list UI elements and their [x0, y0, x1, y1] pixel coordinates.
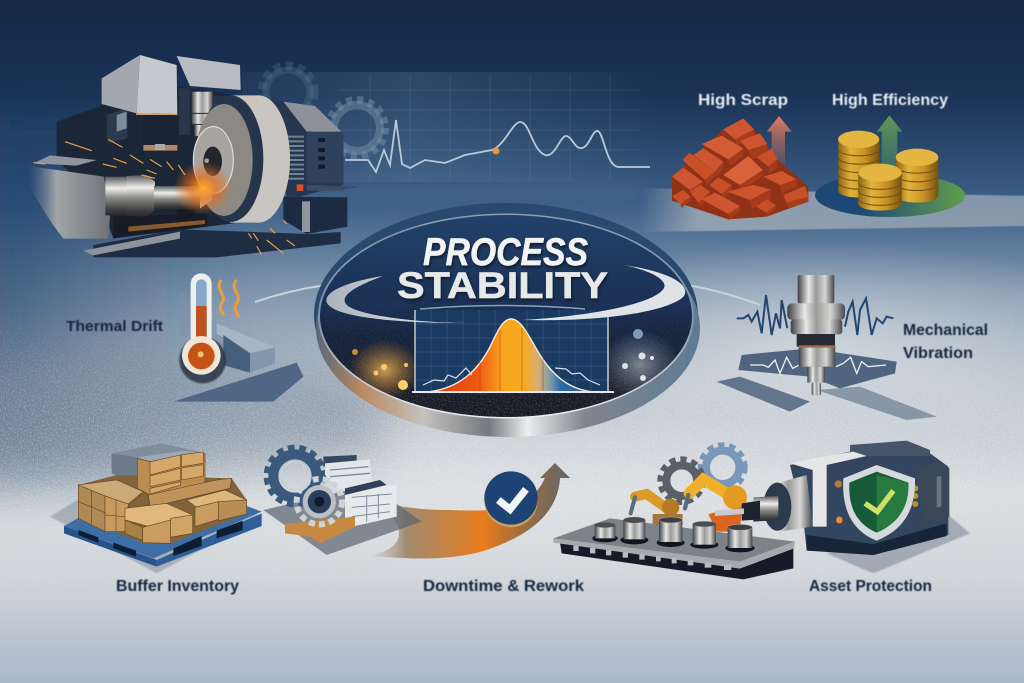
label: asset protection: Asset Protection: [809, 578, 932, 595]
icon: thermometer: [173, 273, 303, 402]
heat waves: [219, 280, 239, 317]
machine rear body: [57, 87, 233, 238]
arrow: scrap up: [767, 116, 792, 170]
icon: gold coins: [815, 115, 965, 217]
spindle: [787, 275, 845, 395]
wooden pallet: [285, 517, 355, 543]
connector lines: [255, 285, 760, 305]
small gear: [297, 479, 342, 524]
label: downtime and rework: Downtime & Rework: [423, 578, 584, 595]
badge halo: [314, 203, 698, 427]
coin stack right: [896, 149, 938, 203]
shadow: [179, 337, 226, 383]
badge face: [320, 215, 692, 417]
machine body: [790, 441, 949, 555]
machine base: [93, 229, 341, 257]
brick pile: [672, 118, 808, 219]
machine nose: [715, 475, 813, 532]
grinding wheel: [193, 95, 290, 223]
base step: [173, 363, 303, 402]
large gear: [267, 448, 323, 504]
chart: stability bell curve: [412, 310, 614, 393]
coin base oval: [815, 174, 965, 217]
metal rim: [316, 219, 700, 437]
pallet: [64, 488, 262, 567]
machined cylinders: [592, 517, 755, 552]
robot arm left: [631, 494, 683, 525]
floor tile: [263, 485, 422, 555]
icon: vibration spindle: [717, 275, 937, 420]
icon: scrap bricks: [672, 116, 808, 219]
upper block: [102, 55, 241, 152]
label: high efficiency: High Efficiency: [832, 92, 948, 109]
documents: [323, 455, 397, 526]
right housing: [267, 100, 359, 234]
icon: check badge: [484, 471, 538, 527]
workpiece: [28, 155, 212, 239]
label: thermal drift: Thermal Drift: [66, 318, 163, 335]
sparks: [33, 139, 295, 255]
icon: robot production line: [553, 446, 795, 579]
title: [397, 231, 608, 306]
coin stack left: [838, 131, 879, 197]
ghost chart: signal trace: [242, 66, 662, 182]
robot arm right: [685, 479, 747, 532]
machine shadow: [827, 513, 970, 573]
label: mechanical vibration: [903, 322, 988, 362]
label: buffer inventory: Buffer Inventory: [116, 578, 239, 595]
icon: buffer inventory pallet: [50, 443, 263, 573]
metal bar: [180, 290, 275, 373]
label: high scrap: High Scrap: [698, 92, 788, 109]
title: PROCESS: [423, 231, 588, 274]
label: mechanical vibration: Mechanical: [903, 322, 988, 339]
carton stacks: [78, 452, 247, 543]
waveform top: [737, 295, 893, 335]
title: STABILITY: [397, 265, 608, 306]
icon: grinding machine: [28, 55, 359, 257]
arrow: efficiency up: [877, 115, 902, 170]
waveform lower: [750, 357, 886, 373]
icon: downtime and rework swoop: [352, 463, 570, 558]
sparkle particles: [325, 300, 690, 420]
label: mechanical vibration: Vibration: [903, 345, 973, 362]
shield: [843, 465, 915, 541]
background gears: [661, 446, 744, 501]
floor shadow: [50, 480, 263, 573]
central badge: [314, 203, 700, 437]
coin stack front: [858, 164, 902, 211]
glass tube: [182, 273, 221, 375]
bell shape: [428, 318, 594, 393]
shadow plate: [717, 348, 937, 420]
icon: gears and documents: [263, 448, 422, 555]
swoosh right: [523, 265, 685, 320]
spindle: [192, 92, 213, 155]
icon: protected machine: [715, 441, 970, 573]
conveyor plate: [553, 518, 795, 579]
swoosh left: [326, 276, 467, 323]
grey back boxes: [112, 443, 205, 492]
